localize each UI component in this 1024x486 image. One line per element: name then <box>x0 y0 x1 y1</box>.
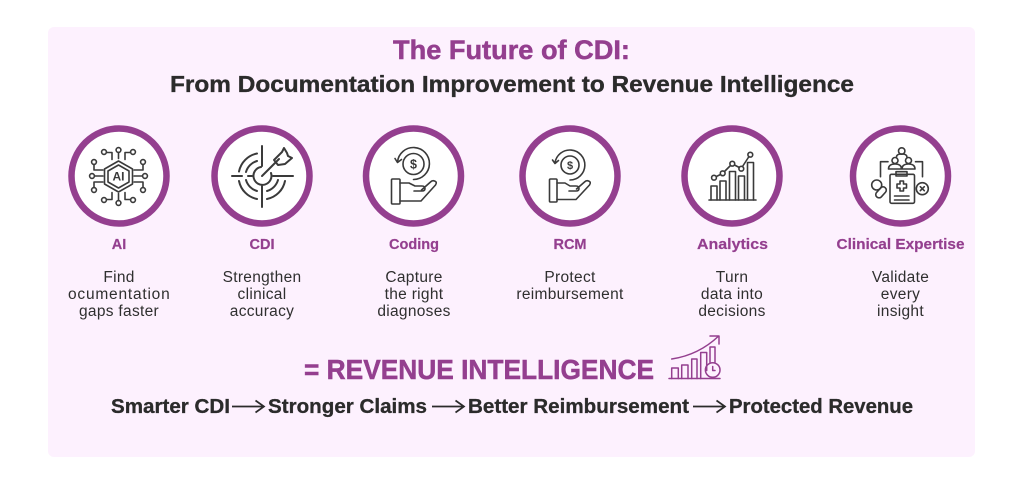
label: AI: AI <box>112 237 126 253</box>
text: RCM description: Protect <box>544 269 596 286</box>
text: Coding description: the right <box>385 286 444 303</box>
label: Analytics: Analytics <box>697 237 768 253</box>
icon: hand with coin: $ <box>410 158 417 172</box>
label: Coding: Coding <box>389 237 439 253</box>
icon: clinical team and clipboard <box>853 128 948 224</box>
column: Coding <box>366 128 461 320</box>
heading: revenue intelligence: = REVENUE INTELLIGENCE <box>304 354 654 385</box>
text: Analytics description: decisions <box>698 303 766 320</box>
text: CDI description: clinical <box>238 286 286 303</box>
flow step: Protected Revenue: Protected Revenue <box>729 396 913 418</box>
text: AI description: ocumentation <box>68 286 170 303</box>
column: Clinical Expertise <box>836 128 964 320</box>
column: Analytics <box>684 128 780 320</box>
label: Clinical Expertise: Clinical Expertise <box>836 237 964 253</box>
text: Clinical Expertise description: Validate <box>872 269 929 286</box>
text: Clinical Expertise description: every <box>881 286 920 303</box>
icon: AI chip <box>72 128 166 224</box>
text: Coding description: diagnoses <box>377 303 451 320</box>
column: CDI <box>214 128 310 320</box>
icon: hand with coin: $ <box>567 160 573 172</box>
text: Clinical Expertise description: insight <box>877 303 924 320</box>
icon: AI chip: AI <box>112 170 124 184</box>
flow step: Stronger Claims: Stronger Claims <box>268 396 427 418</box>
flow step: Smarter CDI: Smarter CDI <box>111 396 230 418</box>
column: AI <box>68 128 170 320</box>
icon: bar and line chart <box>684 128 780 224</box>
label: CDI: CDI <box>250 237 274 253</box>
text: Analytics description: Turn <box>716 269 748 286</box>
arrow <box>232 400 264 412</box>
text: AI description: gaps faster <box>79 303 159 320</box>
flow step: Better Reimbursement: Better Reimbursement <box>468 396 689 418</box>
text: CDI description: Strengthen <box>223 269 301 286</box>
title: The Future of CDI: <box>393 35 630 65</box>
arrow <box>432 400 464 412</box>
icon: target and arrow <box>214 128 310 224</box>
subtitle: From Documentation Improvement to Revenue Intelligence <box>170 71 854 97</box>
column: RCM <box>516 128 624 303</box>
text: Analytics description: data into <box>701 286 763 303</box>
label: RCM: RCM <box>553 237 587 253</box>
flow: Smarter CDI to Protected Revenue <box>111 396 913 418</box>
text: AI description: Find <box>103 269 135 286</box>
text: CDI description: accuracy <box>230 303 294 320</box>
icon: hand with coin <box>522 128 618 224</box>
text: RCM description: reimbursement <box>516 286 624 303</box>
arrow <box>693 400 725 412</box>
icon: hand with coin <box>366 128 461 224</box>
text: Coding description: Capture <box>385 269 443 286</box>
icon: growth chart <box>669 336 720 378</box>
